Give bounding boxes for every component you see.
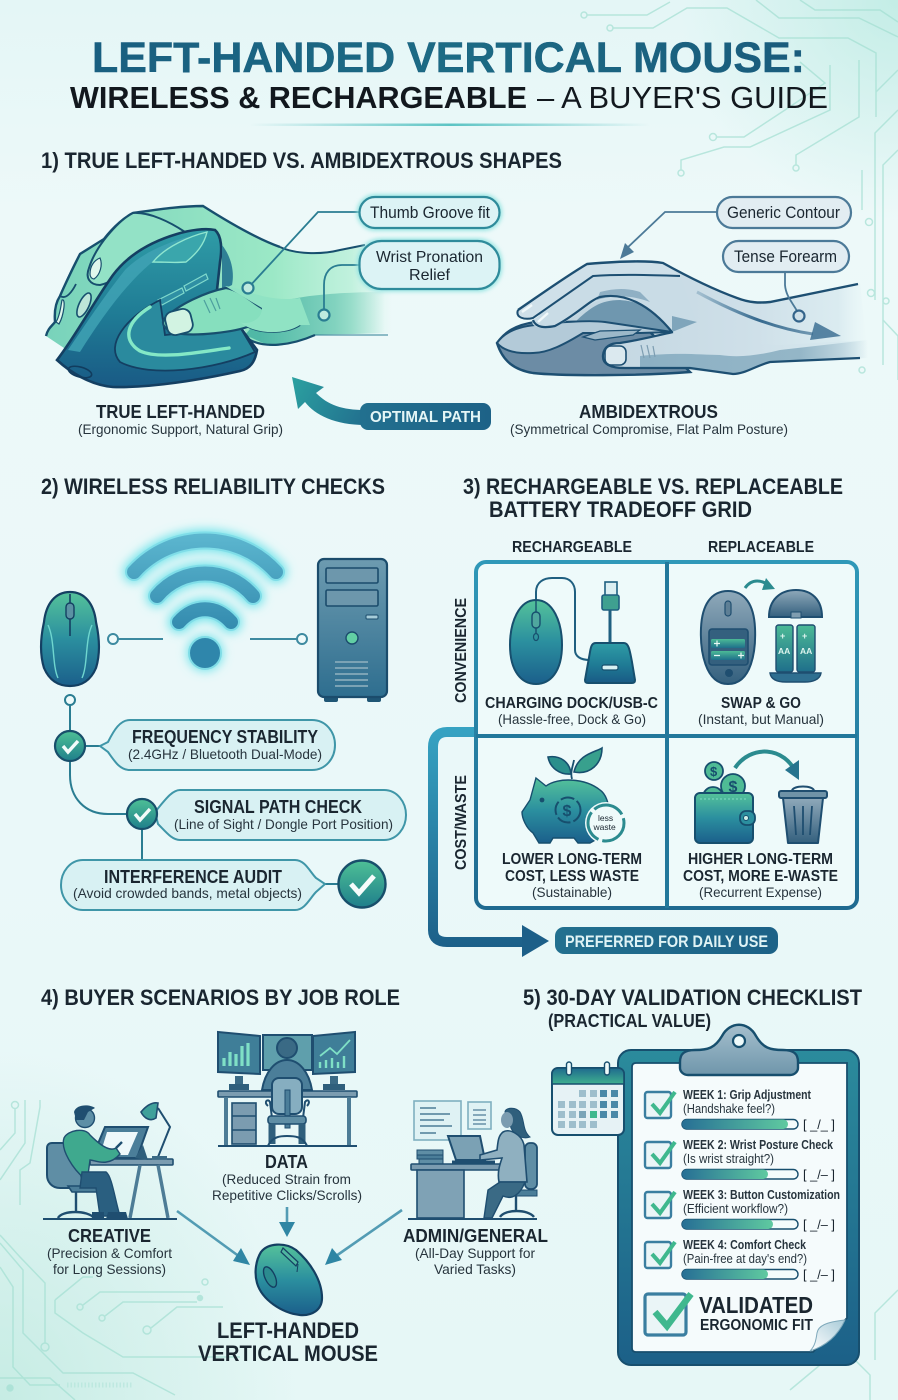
item: week 2: [645, 1138, 835, 1182]
panel: battery tradeoff grid: [433, 539, 857, 957]
paper: [632, 1063, 847, 1352]
callout: tense forearm: [723, 241, 849, 322]
item: week 2: WEEK 2: Wrist Posture Check: [683, 1138, 833, 1152]
pill: preferred for daily use: [555, 927, 778, 954]
arrow: preferred path: [433, 732, 525, 942]
cell: rechargeable cost: [502, 748, 642, 900]
item: week 3: (Efficient workflow?): [683, 1202, 788, 1216]
icon: analyst at three monitors: [218, 1032, 357, 1146]
caption: [698, 695, 824, 727]
scenario: creative: [43, 1103, 177, 1277]
caption: [502, 851, 642, 900]
icon: piggy bank with sprout: less: [598, 813, 613, 823]
cell: replaceable cost: [683, 752, 838, 900]
icon: wireless mouse: [41, 592, 99, 686]
arrow head: [522, 925, 549, 957]
caption: (Hassle-free, Dock & Go): [498, 711, 646, 727]
check: frequency stability: FREQUENCY STABILITY: [132, 727, 318, 747]
icon: wallet, coins and trash can: $: [728, 779, 738, 796]
item: week 3: [645, 1188, 840, 1232]
column headers: REPLACEABLE: [708, 539, 814, 556]
thumb: [163, 288, 264, 334]
row labels: COST/WASTE: [453, 775, 470, 870]
heading: section 1: 1) TRUE LEFT-HANDED VS. AMBIDEXTROUS SHAPES: [41, 148, 562, 173]
label: ambidextrous: [510, 402, 788, 437]
icon: mouse with AA batteries: +: [802, 631, 807, 641]
column headers: [512, 539, 814, 556]
label: true left-handed: TRUE LEFT-HANDED: [96, 402, 265, 422]
caption: ADMIN/GENERAL: [403, 1226, 548, 1246]
callout: wrist pronation relief: [318, 241, 500, 320]
title: [70, 34, 828, 126]
icon: designer with tablet and lamp: [43, 1103, 177, 1219]
pill: preferred for daily use: PREFERRED FOR DAILY USE: [565, 933, 768, 951]
stamp: validated ergonomic fit: ERGONOMIC FIT: [700, 1317, 813, 1334]
caption: (Recurrent Expense): [699, 884, 822, 900]
icon: calendar: [552, 1062, 624, 1135]
tension arrow: [697, 292, 813, 334]
item: week 1: WEEK 1: Grip Adjustment: [683, 1088, 812, 1102]
caption: (Reduced Strain from: [222, 1171, 351, 1187]
heading: section 3: [463, 474, 843, 522]
check: signal path check: SIGNAL PATH CHECK: [194, 797, 362, 817]
timeline connectors: [65, 695, 340, 884]
caption: CREATIVE: [68, 1226, 151, 1246]
icon: wallet, coins and trash can: [695, 752, 827, 843]
mouse shell: [497, 322, 690, 375]
heading: section 5: [523, 985, 862, 1031]
heading: section 5: (PRACTICAL VALUE): [548, 1011, 711, 1031]
scenario: admin/general: [403, 1101, 548, 1277]
icon: mouse with AA batteries: +: [780, 631, 785, 641]
title: LEFT-HANDED VERTICAL MOUSE:: [92, 34, 805, 82]
check: frequency stability: [55, 720, 335, 770]
caption: (Precision & Comfort: [47, 1245, 172, 1261]
icon: mouse and charging dock: [510, 578, 635, 684]
callout: wrist pronation relief: Relief: [409, 267, 451, 284]
callout: thumb groove fit: Thumb Groove fit: [370, 204, 490, 222]
callout: tense forearm: Tense Forearm: [734, 248, 837, 266]
item: week 2: [ _/– ]: [803, 1167, 835, 1182]
panel: buyer scenarios: [43, 1032, 548, 1366]
check: interference audit: INTERFERENCE AUDIT: [104, 867, 282, 887]
label: ambidextrous: AMBIDEXTROUS: [579, 402, 718, 422]
check: interference audit: (Avoid crowded bands, metal objects): [73, 885, 302, 901]
column headers: RECHARGEABLE: [512, 539, 632, 556]
scenario: data: [212, 1032, 362, 1203]
caption: LOWER LONG-TERM: [502, 851, 642, 868]
icon: vertical mouse: [256, 1245, 322, 1315]
caption: COST, MORE E-WASTE: [683, 868, 838, 885]
label: left-handed vertical mouse: VERTICAL MOUSE: [198, 1341, 378, 1366]
panel: wireless reliability: [41, 540, 406, 910]
cell: replaceable convenience: [698, 578, 824, 727]
callout: wrist pronation relief: Wrist Pronation: [376, 249, 483, 266]
icon: office worker at laptop: [408, 1101, 537, 1219]
grid frame: [476, 562, 857, 908]
stamp: validated ergonomic fit: VALIDATED: [699, 1292, 813, 1318]
vertical mouse body: [57, 229, 257, 387]
heading: section 3: 3) RECHARGEABLE VS. REPLACEABLE: [463, 474, 843, 499]
label: ambidextrous: (Symmetrical Compromise, Flat Palm Posture): [510, 421, 788, 437]
arrow: optimal path: [292, 377, 491, 430]
check: signal path check: (Line of Sight / Dongle Port Position): [174, 816, 393, 832]
label: true left-handed: [78, 402, 283, 437]
item: week 1: (Handshake feel?): [683, 1102, 775, 1116]
label: true left-handed: (Ergonomic Support, Natural Grip): [78, 421, 283, 437]
fingers: [532, 275, 697, 332]
icon: mouse with AA batteries: AA: [778, 646, 790, 656]
icon: mouse with AA batteries: [701, 578, 822, 684]
icon: wallet, coins and trash can: $: [710, 764, 718, 779]
caption: DATA: [265, 1152, 308, 1172]
heading: section 4: 4) BUYER SCENARIOS BY JOB ROLE: [41, 985, 400, 1010]
label: left-handed vertical mouse: LEFT-HANDED: [217, 1318, 359, 1343]
panel: true left-handed illustration: [46, 197, 500, 437]
caption: [47, 1226, 172, 1277]
title: – A BUYER'S GUIDE: [537, 80, 828, 115]
flat hand on symmetrical mouse: [497, 261, 868, 375]
caption: [485, 695, 658, 727]
item: week 1: [ _/_ ]: [803, 1117, 835, 1132]
item: week 1: [645, 1088, 835, 1132]
check: signal path check: [127, 790, 406, 840]
check: interference audit: [61, 860, 386, 910]
title: WIRELESS & RECHARGEABLE: [70, 80, 527, 115]
heading: section 2: 2) WIRELESS RELIABILITY CHECKS: [41, 474, 385, 499]
caption: [403, 1226, 548, 1277]
callout: generic contour: Generic Contour: [727, 204, 840, 222]
scroll wheel: [74, 291, 94, 319]
caption: [212, 1152, 362, 1203]
callout: generic contour: [620, 197, 851, 259]
caption: SWAP & GO: [721, 695, 801, 712]
item: week 3: WEEK 3: Button Customization: [683, 1188, 840, 1202]
caption: (Instant, but Manual): [698, 711, 824, 727]
caption: (Sustainable): [532, 884, 612, 900]
heading: section 3: BATTERY TRADEOFF GRID: [489, 497, 752, 522]
caption: [683, 851, 838, 900]
item: week 4: (Pain-free at day's end?): [683, 1252, 807, 1266]
cell: rechargeable convenience: [485, 578, 658, 727]
panel: validation checklist: [552, 1025, 859, 1365]
caption: for Long Sessions): [53, 1261, 166, 1277]
icon: piggy bank with sprout: $: [562, 803, 572, 820]
icon: mouse with AA batteries: AA: [800, 646, 812, 656]
clip: [680, 1025, 798, 1075]
label: left-handed vertical mouse: [198, 1318, 378, 1366]
check: frequency stability: (2.4GHz / Bluetooth Dual-Mode): [128, 746, 322, 762]
icon: piggy bank with sprout: waste: [592, 822, 616, 832]
item: week 4: [ _/– ]: [803, 1267, 835, 1282]
arrows into mouse: [177, 1207, 402, 1265]
caption: Varied Tasks): [434, 1261, 516, 1277]
heading: section 5: 5) 30-DAY VALIDATION CHECKLIST: [523, 985, 862, 1010]
thumb and wrist: [603, 322, 868, 374]
hand gripping vertical mouse: [46, 206, 392, 387]
caption: COST, LESS WASTE: [505, 868, 639, 885]
item: week 2: (Is wrist straight?): [683, 1152, 774, 1166]
row labels: [453, 598, 470, 870]
callout: thumb groove fit: [242, 197, 500, 294]
icon: wifi signal: [134, 540, 276, 671]
arrow: optimal path: OPTIMAL PATH: [370, 409, 481, 426]
icon: piggy bank with sprout: [522, 748, 627, 844]
caption: Repetitive Clicks/Scrolls): [212, 1187, 362, 1203]
caption: CHARGING DOCK/USB-C: [485, 695, 658, 712]
item: week 4: [645, 1238, 835, 1282]
item: week 3: [ _/– ]: [803, 1217, 835, 1232]
clipboard board: [618, 1050, 859, 1365]
panel: ambidextrous illustration: [497, 197, 868, 437]
caption: HIGHER LONG-TERM: [688, 851, 833, 868]
icon: desktop tower: [318, 559, 387, 702]
index finger: [88, 213, 185, 285]
stamp: validated ergonomic fit: [645, 1292, 813, 1335]
item: week 4: WEEK 4: Comfort Check: [683, 1238, 806, 1252]
caption: (All-Day Support for: [415, 1245, 535, 1261]
link nodes: [108, 634, 307, 644]
row labels: CONVENIENCE: [453, 598, 470, 703]
